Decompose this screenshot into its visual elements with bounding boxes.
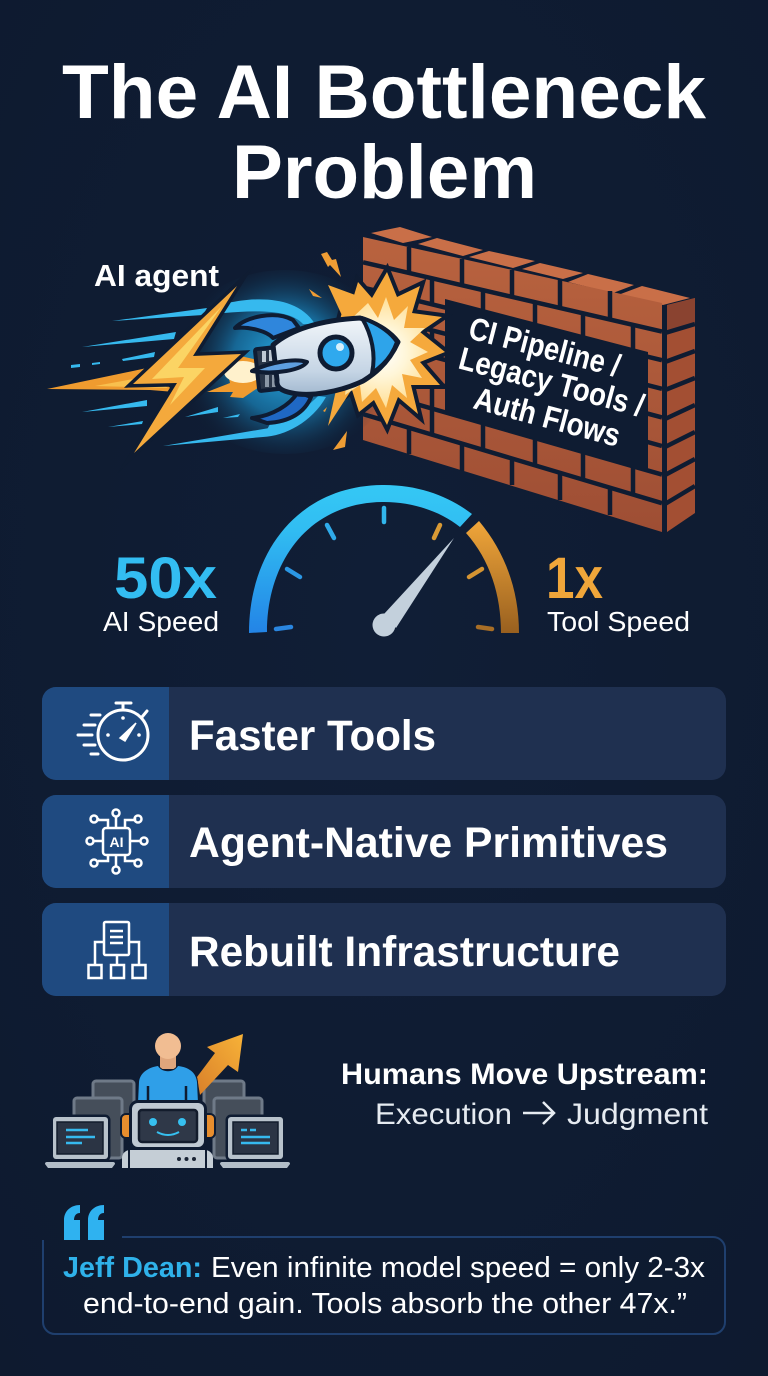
rocket top fin <box>235 315 299 338</box>
speed gauge <box>249 485 519 636</box>
wall sign text: CI Pipeline / <box>465 310 624 384</box>
tool speed stat <box>546 546 690 637</box>
humans move upstream text: Humans Move Upstream: <box>341 1058 708 1091</box>
impact burst <box>328 272 445 426</box>
title <box>62 50 707 215</box>
rocket <box>235 315 398 423</box>
wall top bricks <box>371 227 690 305</box>
humans and robot illustration <box>45 1033 290 1168</box>
humans move upstream text: Execution <box>375 1098 512 1131</box>
row: agent-native primitives <box>42 795 726 888</box>
wall sign text: Legacy Tools / <box>455 340 648 424</box>
left front laptop <box>45 1117 115 1168</box>
tool speed stat: 1x <box>546 546 603 611</box>
icon: AI chip <box>86 810 148 874</box>
title: The AI Bottleneck <box>62 50 707 135</box>
rocket engine <box>255 347 281 391</box>
back laptops <box>74 1081 262 1158</box>
label: Faster Tools <box>189 712 436 760</box>
quote panel <box>43 1205 725 1334</box>
AI agent label: AI agent <box>94 258 219 293</box>
chip text: AI <box>110 834 124 850</box>
window highlight <box>336 343 344 351</box>
gauge blue arc <box>249 485 472 633</box>
quote text: Even infinite model speed = only 2-3x <box>211 1252 706 1284</box>
rocket glow <box>173 270 397 454</box>
lightning bolt <box>133 286 241 453</box>
robot <box>122 1103 214 1168</box>
quote text: Jeff Dean: <box>63 1252 202 1284</box>
wall side face <box>665 298 695 532</box>
arrow <box>523 1102 554 1124</box>
rocket body <box>273 318 398 394</box>
impact shards <box>309 252 347 450</box>
humans move upstream text: Judgment <box>567 1098 709 1131</box>
tool speed stat: Tool Speed <box>547 606 690 637</box>
orange exhaust streak <box>47 368 175 392</box>
rocket flame <box>207 352 262 398</box>
rocket window <box>320 337 352 369</box>
icon: stopwatch <box>78 703 148 760</box>
wall sign text <box>455 310 648 454</box>
person <box>138 1033 198 1103</box>
wall sign panel <box>445 299 648 472</box>
icon: quotation mark <box>64 1205 104 1240</box>
rocket nose <box>362 318 397 373</box>
growth arrow <box>197 1034 243 1095</box>
humans move upstream text <box>341 1058 709 1131</box>
gauge ticks <box>276 508 492 629</box>
AI agent rocket illustration <box>47 252 445 454</box>
AI speed stat: AI Speed <box>103 606 219 637</box>
title: Problem <box>232 130 537 215</box>
label: Rebuilt Infrastructure <box>189 928 620 976</box>
rocket bottom fin <box>252 392 311 423</box>
wall front face <box>363 237 662 532</box>
gauge orange arc <box>466 521 519 633</box>
label: Agent-Native Primitives <box>189 819 668 867</box>
right front laptop <box>220 1117 290 1168</box>
row: rebuilt infrastructure <box>42 903 726 996</box>
speed lines <box>71 299 326 446</box>
icon: hierarchy <box>88 922 146 978</box>
quote text <box>63 1252 706 1320</box>
row: faster tools <box>42 687 726 780</box>
quote text: end-to-end gain. Tools absorb the other 47x.” <box>83 1288 687 1320</box>
gauge needle <box>372 538 454 636</box>
rocket side wing <box>252 360 307 372</box>
wall sign text: Auth Flows <box>470 380 624 454</box>
AI speed stat <box>103 546 219 637</box>
AI speed stat: 50x <box>114 546 217 611</box>
brick wall labelled with bottlenecks <box>363 227 695 532</box>
